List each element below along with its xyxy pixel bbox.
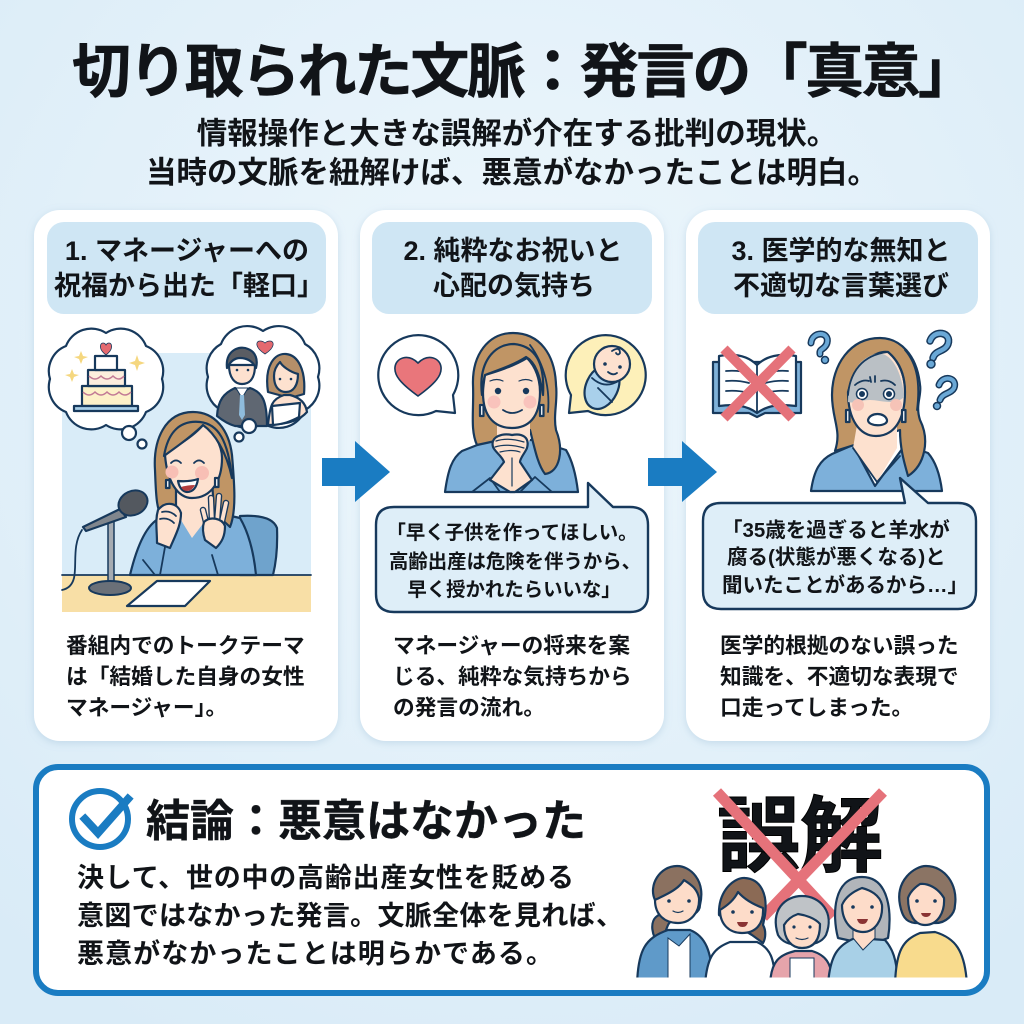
card 3 body text: 知識を、不適切な表現で <box>720 664 959 689</box>
card 3 body text: 口走ってしまった。 <box>720 695 913 720</box>
card 1 body text: マネージャー」。 <box>66 695 227 720</box>
speech bubble: quote: 聞いたことがあるから…」 <box>722 573 968 597</box>
right hand <box>203 496 226 526</box>
paper <box>127 581 210 606</box>
card 3 heading: 3. 医学的な無知と <box>731 236 951 266</box>
person 3 <box>770 894 830 978</box>
title: 切り取られた文脈：発言の「真意」 <box>72 39 977 105</box>
person 1 <box>637 866 713 985</box>
left hand <box>156 504 181 548</box>
icons: question marks <box>811 333 955 410</box>
card 1 heading: 1. マネージャーへの <box>65 236 309 266</box>
illustration: group of women <box>637 866 967 985</box>
icon: check mark <box>72 791 128 847</box>
card 3 body text <box>720 633 959 720</box>
person 4 <box>828 877 898 985</box>
card 1 heading <box>47 222 326 314</box>
card 3 heading <box>698 222 978 314</box>
thought cloud: couple <box>207 326 319 442</box>
card 1 body text: は「結婚した自身の女性 <box>66 664 305 689</box>
speech bubble: quote: 腐る(状態が悪くなる)と <box>727 545 946 569</box>
card 2 heading <box>372 222 652 314</box>
card 2 body text: マネージャーの将来を案 <box>393 633 630 658</box>
card 2 body text: じる、純粋な気持ちから <box>393 664 632 689</box>
subtitle <box>146 116 878 190</box>
icon: heart bubble <box>378 335 458 415</box>
card 3 body text: 医学的根拠のない誤った <box>720 633 959 658</box>
panel: card 2 <box>360 210 664 741</box>
conclusion text: 意図ではなかった発言。文脈全体を見れば、 <box>77 901 623 931</box>
conclusion text: 悪意がなかったことは明らかである。 <box>77 938 553 969</box>
card 1 body text: 番組内でのトークテーマ <box>66 633 305 658</box>
microphone <box>62 486 152 595</box>
person 5 <box>895 866 967 985</box>
subtitle: 情報操作と大きな誤解が介在する批判の現状。 <box>197 116 837 151</box>
conclusion heading: 結論：悪意はなかった <box>146 797 586 846</box>
card 2 body text: の発言の流れ。 <box>393 695 545 720</box>
arrow: step 1 to 2 <box>322 441 390 502</box>
card 1 body text <box>66 633 305 720</box>
subtitle: 当時の文脈を紐解けば、悪意がなかったことは明白。 <box>146 155 878 190</box>
speech bubble: quote: 高齢出産は危険を伴うから、 <box>389 550 641 573</box>
speech bubble: quote <box>376 483 648 612</box>
conclusion text: 決して、世の中の高齢出産女性を貶める <box>77 863 574 893</box>
icon: crossed-out book <box>713 349 801 418</box>
speech bubble: quote: 「35歳を過ぎると羊水が <box>722 518 950 542</box>
thought cloud: wedding cake <box>49 329 163 448</box>
panel: card 3 <box>686 210 990 741</box>
card 2 body text <box>393 633 632 720</box>
speech bubble: quote <box>703 478 976 609</box>
icon: baby bubble <box>566 335 646 415</box>
card 1 heading: 祝福から出た「軽口」 <box>54 271 324 301</box>
person 2 <box>705 878 775 985</box>
woman speaking <box>130 412 256 575</box>
chair <box>240 516 277 575</box>
panel: card 1 <box>34 210 338 741</box>
card 2 heading: 心配の気持ち <box>433 271 595 301</box>
conclusion text <box>77 863 623 969</box>
speech bubble: quote: 「早く子供を作ってほしい。 <box>386 522 638 544</box>
speech bubble: quote: 早く授かれたらいいな」 <box>407 579 621 601</box>
illustration: talk show scene <box>49 326 319 612</box>
arrow: step 2 to 3 <box>648 441 717 502</box>
illustration: woman praying <box>445 333 578 492</box>
panel: conclusion <box>36 767 987 993</box>
crossed-out word: misunderstanding: 誤解 <box>717 790 883 883</box>
card 3 heading: 不適切な言葉選び <box>733 271 949 301</box>
illustration: confused woman <box>811 338 942 491</box>
card 2 heading: 2. 純粋なお祝いと <box>403 236 623 266</box>
